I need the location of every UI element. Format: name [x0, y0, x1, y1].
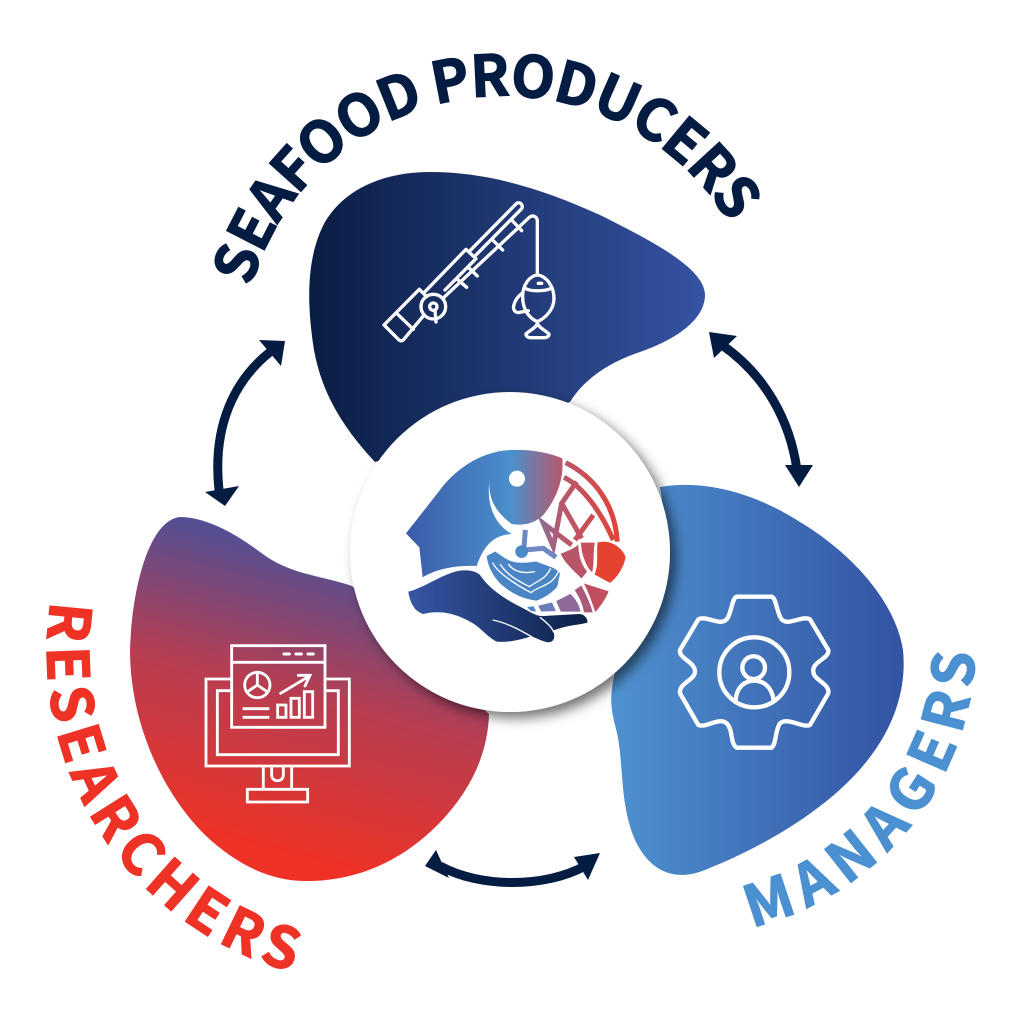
panel: seafood producers blob [309, 172, 705, 462]
central circle [350, 392, 670, 712]
oyster [487, 552, 560, 601]
fish eye [509, 471, 525, 487]
growth arrow [281, 675, 310, 693]
icon: computer with analytics dashboard [206, 646, 349, 802]
icon: gear with person [680, 597, 828, 748]
hanging fish [523, 275, 554, 322]
person ring [719, 637, 789, 707]
monitor stand [247, 766, 308, 802]
monitor [206, 679, 349, 766]
pie chart [245, 672, 270, 698]
window dots [284, 649, 313, 658]
shrimp [525, 541, 627, 614]
fish body [406, 450, 563, 577]
arrow: producers to managers [709, 332, 813, 487]
hook [524, 530, 556, 557]
reel [421, 294, 446, 319]
icon: central fish, net, oyster, shrimp and hand logo [406, 450, 627, 642]
panel: researchers blob [130, 517, 489, 881]
bars [278, 692, 313, 717]
panel: managers blob [611, 485, 904, 875]
arrow: producers to researchers [205, 340, 285, 506]
rod handle [384, 289, 427, 341]
arrow: researchers to managers [425, 850, 600, 882]
heading: managers: MANAGERS [743, 652, 976, 928]
gear outline [680, 597, 828, 748]
hand [408, 570, 587, 642]
heading: researchers: RESEARCHERS [46, 605, 302, 969]
net [543, 463, 617, 547]
text lines [243, 709, 269, 717]
rod lower shaft and guides [444, 216, 537, 297]
person head [742, 656, 765, 679]
icon: fishing rod and fish [384, 203, 554, 341]
person shoulders [736, 681, 774, 700]
rod upper shaft [425, 203, 522, 292]
heading: seafood producers: SEAFOOD PRODUCERS [214, 53, 760, 284]
dashboard window [232, 646, 325, 727]
